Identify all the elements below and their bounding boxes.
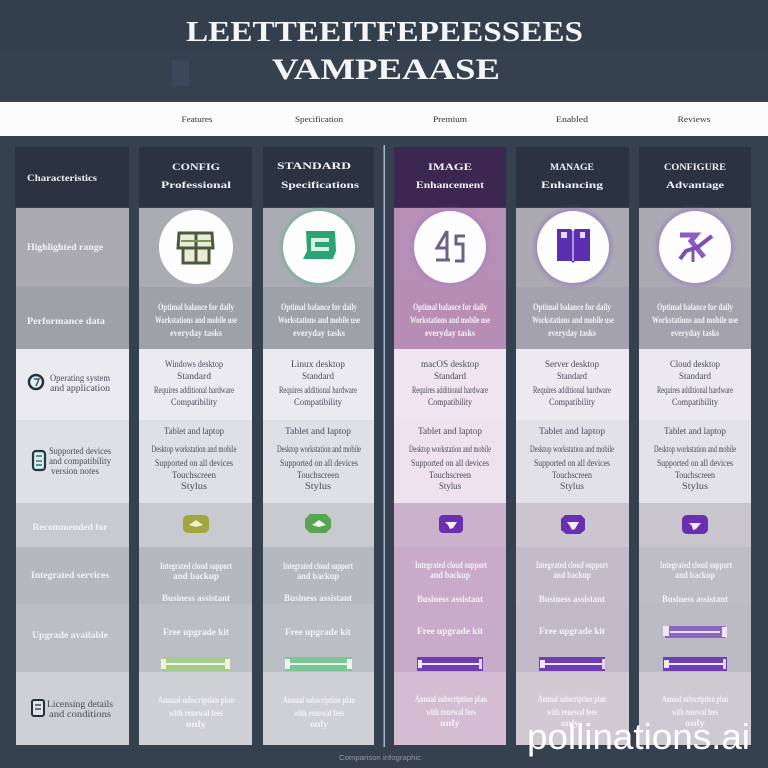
icon: column 5 circle — [656, 208, 734, 286]
panel: column 5: Stylus — [682, 481, 709, 491]
icon: column 4 badge — [561, 515, 585, 534]
panel: column 4: Supported on all devices — [534, 458, 610, 468]
panel: column 1: Windows desktop — [165, 359, 223, 369]
panel: column 3: Enhancement — [416, 180, 484, 190]
panel: column 3: Desktop workstation and mobile — [409, 444, 491, 454]
panel: column 2: Workstations and mobile use — [278, 315, 360, 325]
panel: row labels column: Operating system — [50, 373, 110, 383]
panel: column 5: Annual subscription plan — [662, 694, 728, 704]
icon: row 4 badge — [33, 451, 45, 470]
panel: column 4: Free upgrade kit — [539, 626, 605, 636]
panel: column 2: Stylus — [305, 481, 332, 491]
panel: column 2: with renewal fees — [294, 708, 344, 718]
panel: column 2: Specifications — [281, 180, 360, 190]
panel: column 2: and backup — [297, 571, 339, 581]
icon: column 3 badge — [439, 515, 463, 533]
panel: row labels column: Supported devices — [49, 446, 111, 456]
panel: column 5: Cloud desktop — [670, 359, 720, 369]
bar: column 4 — [539, 657, 605, 671]
panel: column 2: Annual subscription plan — [283, 695, 355, 705]
panel: row labels column: and compatibility — [49, 456, 111, 466]
panel: column 2: Optimal balance for daily — [281, 302, 357, 312]
panel: column 4: Tablet and laptop — [539, 426, 606, 436]
watermark: pollinations.ai — [527, 716, 750, 757]
icon: row 3 badge — [29, 375, 43, 389]
panel: column 4: Requires additional hardware — [533, 385, 611, 395]
panel: row labels column: Licensing details — [47, 699, 114, 709]
panel: column 5: Requires additional hardware — [657, 385, 733, 395]
panel: column 3 — [394, 147, 506, 745]
panel: column 2 — [263, 147, 374, 745]
icon: column 3 circle — [411, 208, 489, 286]
panel: column 4: MANAGE — [550, 162, 594, 172]
panel: column 4: Server desktop — [545, 359, 599, 369]
panel: column 1: Tablet and laptop — [164, 426, 224, 436]
panel: column 4: and backup — [553, 570, 591, 580]
panel: row labels column: version notes — [51, 466, 99, 476]
panel: column 5: everyday tasks — [671, 328, 719, 338]
panel: column 5: Compatibility — [672, 397, 718, 407]
column labels band — [0, 102, 768, 136]
panel: column 4: Optimal balance for daily — [533, 302, 611, 312]
panel: row labels column: Integrated services — [31, 570, 110, 580]
bar: column 1 — [161, 657, 230, 671]
panel: row labels column: and application — [50, 383, 111, 393]
icon: column 4 circle — [534, 208, 612, 286]
panel: column 1: Standard — [177, 371, 212, 381]
panel: row labels column — [15, 147, 129, 745]
bar: column 3 — [417, 657, 483, 671]
icon: column 1 badge — [183, 515, 209, 533]
panel: column 1: Compatibility — [171, 397, 217, 407]
panel: column 2: Touchscreen — [297, 470, 339, 480]
panel: column 4: Desktop workstation and mobile — [530, 444, 614, 454]
panel: column 2: Free upgrade kit — [285, 627, 351, 637]
panel: column 3: Touchscreen — [429, 470, 471, 480]
panel: column 3: Stylus — [439, 481, 461, 491]
panel: column 5: Business assistant — [662, 594, 728, 604]
panel: column 1: Integrated cloud support — [160, 561, 232, 571]
panel: column 1: CONFIG — [172, 162, 220, 172]
title: LEETTEEITFEPEESSEES — [186, 16, 583, 48]
panel: column 2: everyday tasks — [293, 328, 345, 338]
panel: column 1: with renewal fees — [169, 708, 223, 718]
panel: row labels column: Characteristics — [27, 173, 98, 183]
panel: column 3: only — [440, 718, 461, 728]
panel: column 4: Standard — [557, 371, 587, 381]
panel: column 3: Integrated cloud support — [415, 560, 487, 570]
icon: column 5 badge — [682, 515, 708, 534]
panel: column 4: only — [561, 718, 580, 728]
panel: column 5: Workstations and mobile use — [652, 315, 738, 325]
panel: column 1: Business assistant — [162, 593, 230, 603]
panel: column 2: Tablet and laptop — [285, 426, 352, 436]
panel: column 3: Standard — [434, 371, 466, 381]
panel: column 5: Advantage — [666, 180, 724, 190]
panel: column 3: Tablet and laptop — [418, 426, 483, 436]
panel: column 2: Supported on all devices — [280, 458, 358, 468]
panel: column 3: and backup — [430, 570, 470, 580]
panel: column 1: Professional — [161, 180, 232, 190]
icon: column 1 circle — [159, 210, 233, 284]
panel: column 5: with renewal fees — [672, 707, 718, 717]
icon: column 2 badge — [305, 514, 331, 533]
panel: column 5 — [639, 147, 751, 745]
panel: row labels column: Performance data — [27, 316, 106, 326]
panel: column 1: Optimal balance for daily — [158, 302, 234, 312]
panel: column 5: Integrated cloud support — [660, 560, 732, 570]
panel: column 5: Desktop workstation and mobile — [654, 444, 736, 454]
title: VAMPEAASE — [272, 53, 500, 86]
panel: column 1 — [139, 147, 252, 745]
panel: column 2: Integrated cloud support — [283, 561, 353, 571]
panel: column 5: only — [685, 718, 706, 728]
panel: column 4: Business assistant — [539, 594, 605, 604]
panel: column 1: Free upgrade kit — [163, 627, 229, 637]
panel: column 5: CONFIGURE — [664, 162, 726, 172]
panel: row labels column: Highlighted range — [27, 242, 103, 252]
bar: column 2 — [285, 657, 352, 671]
title — [186, 16, 583, 86]
panel: column 3: IMAGE — [428, 162, 472, 172]
panel: row labels column: Recommended for — [32, 522, 108, 532]
panel: column 3: everyday tasks — [425, 328, 475, 338]
panel: column 3: Supported on all devices — [411, 458, 489, 468]
panel: column 3: Annual subscription plan — [415, 694, 487, 704]
bar: column 5 — [663, 657, 727, 671]
panel: column 1: Desktop workstation and mobile — [152, 444, 237, 454]
panel: column 3: Optimal balance for daily — [413, 302, 487, 312]
panel: column 3: Free upgrade kit — [417, 626, 483, 636]
panel: column 2: Compatibility — [294, 397, 342, 407]
panel: column 3: Compatibility — [428, 397, 472, 407]
panel: column 1: everyday tasks — [170, 328, 222, 338]
panel: row labels column: and conditions — [49, 709, 112, 719]
column labels band: Premium — [433, 115, 468, 124]
panel: column 1: and backup — [173, 571, 219, 581]
panel: column 1: Touchscreen — [172, 470, 216, 480]
icon: column 2 circle — [281, 209, 357, 285]
panel: column 3: with renewal fees — [426, 707, 476, 717]
icon: row 8 badge — [32, 700, 44, 716]
upgrade bar with label: column 5 — [663, 626, 727, 638]
panel: column 1: only — [186, 719, 207, 729]
panel: column 4: Integrated cloud support — [536, 560, 608, 570]
panel: column 4: Enhancing — [541, 180, 604, 190]
panel: column 1: Stylus — [181, 481, 208, 491]
panel: row labels column: Upgrade available — [32, 630, 108, 640]
divider — [384, 145, 385, 747]
column labels band: Features — [182, 115, 212, 124]
panel: column 3: Business assistant — [417, 594, 483, 604]
panel: column 3: Workstations and mobile use — [410, 315, 490, 325]
panel: column 1: Workstations and mobile use — [155, 315, 237, 325]
panel: column 4: with renewal fees — [547, 707, 597, 717]
panel: column 2: Desktop workstation and mobile — [277, 444, 361, 454]
panel: column 2: Business assistant — [284, 593, 352, 603]
panel: column 4: Compatibility — [549, 397, 595, 407]
panel: column 4: Stylus — [560, 481, 585, 491]
panel: column 3: macOS desktop — [421, 359, 480, 369]
panel: column 5: and backup — [675, 570, 715, 580]
panel: column 4: Annual subscription plan — [538, 694, 606, 704]
panel: column 2: STANDARD — [277, 161, 352, 171]
column labels band: Reviews — [678, 115, 710, 124]
panel: column 4 — [516, 147, 629, 745]
panel: column 1: Supported on all devices — [155, 458, 233, 468]
panel: column 2: only — [310, 719, 329, 729]
panel: column 1: Requires additional hardware — [154, 385, 234, 395]
panel: column 3: Requires additional hardware — [412, 385, 488, 395]
column labels band: Enabled — [556, 115, 588, 124]
panel: column 5: Supported on all devices — [657, 458, 733, 468]
panel: column 5: Touchscreen — [675, 470, 715, 480]
panel: column 4: everyday tasks — [548, 328, 596, 338]
panel: column 2: Standard — [302, 371, 334, 381]
panel: column 5: Tablet and laptop — [664, 426, 726, 436]
panel: column 4: Workstations and mobile use — [532, 315, 614, 325]
panel: column 5: Standard — [679, 371, 711, 381]
panel: column 5: Optimal balance for daily — [657, 302, 733, 312]
column labels band: Specification — [295, 115, 343, 124]
footer caption: Comparison infographic — [339, 755, 422, 762]
panel: column 1: Annual subscription plan — [158, 695, 234, 705]
panel: column 2: Requires additional hardware — [279, 385, 357, 395]
panel: column 2: Linux desktop — [291, 359, 346, 369]
panel: column 4: Touchscreen — [552, 470, 592, 480]
